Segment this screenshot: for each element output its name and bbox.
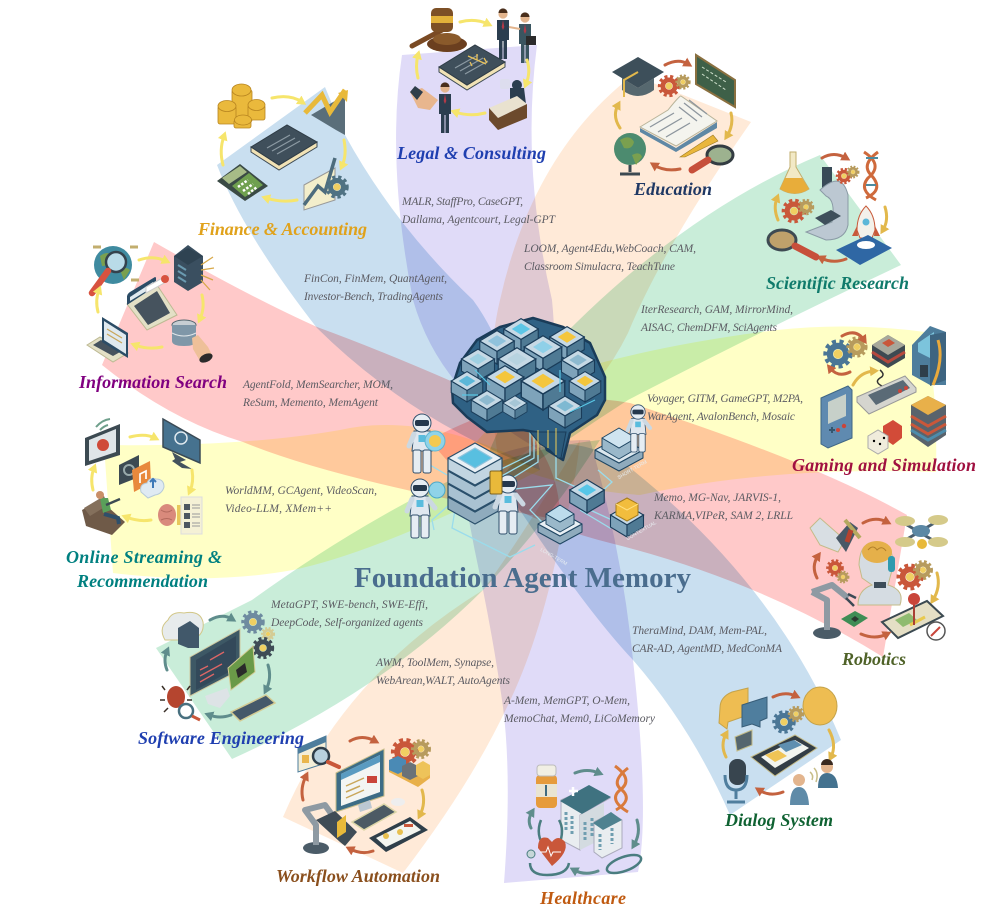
petal: robotics <box>430 399 907 657</box>
model list: MemoChat, Mem0, LiCoMemory <box>503 713 656 725</box>
model list: TheraMind, DAM, Mem-PAL, <box>632 625 767 637</box>
short-term memory node: SHORT-TERM <box>617 459 648 481</box>
petal: finance <box>217 87 540 470</box>
model list: A-Mem, MemGPT, O-Mem, <box>503 695 630 707</box>
heading: Scientific Research <box>766 273 909 293</box>
icon: gaming cycle <box>821 326 946 454</box>
heading: Software Engineering <box>138 728 304 748</box>
heading: Online Streaming & <box>66 547 222 567</box>
model list <box>303 273 447 303</box>
heading: Gaming and Simulation <box>792 455 976 475</box>
panel: healthcare <box>503 695 656 908</box>
icon: robotics cycle <box>810 515 948 640</box>
heading: Finance & Accounting <box>197 219 367 239</box>
model list: DeepCode, Self-organized agents <box>270 617 424 629</box>
title: Foundation Agent Memory <box>354 562 692 594</box>
model list: AgentFold, MemSearcher, MOM, <box>242 379 393 391</box>
heading: Legal & Consulting <box>396 143 546 163</box>
icon: streaming cycle <box>82 419 202 535</box>
model list <box>225 485 377 515</box>
panel: dialog system <box>632 625 838 830</box>
heading: Education <box>633 179 712 199</box>
brain <box>451 318 605 460</box>
icon: finance cycle <box>217 84 348 210</box>
heading: Information Search <box>78 372 227 392</box>
short-term memory node <box>595 405 650 481</box>
model list <box>401 196 557 226</box>
panel: gaming and simulation <box>647 326 976 475</box>
server stack <box>448 443 502 524</box>
central illustration: brain and memory stores <box>407 318 658 567</box>
working memory node <box>570 480 604 513</box>
panel: information search <box>78 245 393 409</box>
panel: robotics <box>653 492 948 669</box>
icon: legal cycle <box>410 8 536 133</box>
icon: dialog cycle <box>719 687 838 805</box>
model list <box>653 492 793 522</box>
contextual memory node: CONTEXTUAL <box>625 520 658 542</box>
model list: FinCon, FinMem, QuantAgent, <box>303 273 447 285</box>
petal: science <box>470 155 901 510</box>
model list: AISAC, ChemDFM, SciAgents <box>640 322 778 334</box>
heading: Dialog System <box>724 810 833 830</box>
model list <box>375 657 511 687</box>
model list: Dallama, Agentcourt, Legal-GPT <box>401 214 557 226</box>
model list <box>632 625 783 655</box>
icon: software cycle <box>160 612 275 721</box>
long-term memory node: LONG-TERM <box>539 547 568 567</box>
icon: search cycle <box>87 245 214 365</box>
heading: Workflow Automation <box>276 866 440 886</box>
petal: information search <box>102 242 560 520</box>
petal: software <box>156 440 600 759</box>
panel: legal and consulting <box>396 8 557 226</box>
model list <box>242 379 393 409</box>
model list: WarAgent, AvalonBench, Mosaic <box>647 411 795 423</box>
model list: CAR-AD, AgentMD, MedConMA <box>632 643 783 655</box>
model list <box>503 695 656 725</box>
model list: Video-LLM, XMem++ <box>225 503 332 515</box>
model list: Investor-Bench, TradingAgents <box>303 291 444 303</box>
robot with glass orb <box>407 479 445 538</box>
heading: Healthcare <box>539 888 626 908</box>
icon: workflow cycle <box>298 736 430 854</box>
coloured petal background <box>102 45 936 883</box>
icon: education cycle <box>612 55 735 174</box>
petal: workflow <box>283 440 580 873</box>
model list: LOOM, Agent4Edu,WebCoach, CAM, <box>523 243 696 255</box>
panel: scientific research <box>640 152 909 334</box>
contextual memory node <box>610 498 658 542</box>
model list <box>270 599 428 629</box>
model list: MetaGPT, SWE-bench, SWE-Effi, <box>270 599 428 611</box>
model list: WebArean,WALT, AutoAgents <box>376 675 511 687</box>
panel: online streaming and recommendation <box>66 419 377 591</box>
icon: science cycle <box>768 152 892 265</box>
petal: dialog <box>500 444 841 815</box>
petal: legal <box>396 45 554 450</box>
petal: healthcare <box>460 440 643 883</box>
heading: Recommendation <box>76 571 208 591</box>
robot with memory orb <box>409 414 445 473</box>
panel: workflow automation <box>276 657 511 886</box>
robot at server with tablet <box>490 471 523 534</box>
model list: KARMA,VIPeR, SAM 2, LRLL <box>653 510 793 522</box>
model list: WorldMM, GCAgent, VideoScan, <box>225 485 377 497</box>
petal: streaming <box>104 425 540 578</box>
model list <box>640 304 793 334</box>
model list: ReSum, Memento, MemAgent <box>242 397 379 409</box>
heading: Robotics <box>841 649 906 669</box>
model list: IterResearch, GAM, MirrorMind, <box>640 304 793 316</box>
model list <box>647 393 803 423</box>
long-term memory node <box>538 505 582 567</box>
model list <box>523 243 696 273</box>
panel: software engineering <box>138 599 428 748</box>
model list: AWM, ToolMem, Synapse, <box>375 657 494 669</box>
model list: Memo, MG-Nav, JARVIS-1, <box>653 492 781 504</box>
model list: Voyager, GITM, GameGPT, M2PA, <box>647 393 803 405</box>
panel: education <box>523 55 735 273</box>
model list: MALR, StaffPro, CaseGPT, <box>401 196 523 208</box>
circuit lines <box>430 432 640 557</box>
petal: gaming <box>470 326 936 495</box>
model list: Classroom Simulacra, TeachTune <box>524 261 675 273</box>
panel: finance and accounting <box>197 84 447 303</box>
petal: education <box>492 75 751 470</box>
heading <box>66 547 222 591</box>
icon: healthcare cycle <box>527 765 643 877</box>
